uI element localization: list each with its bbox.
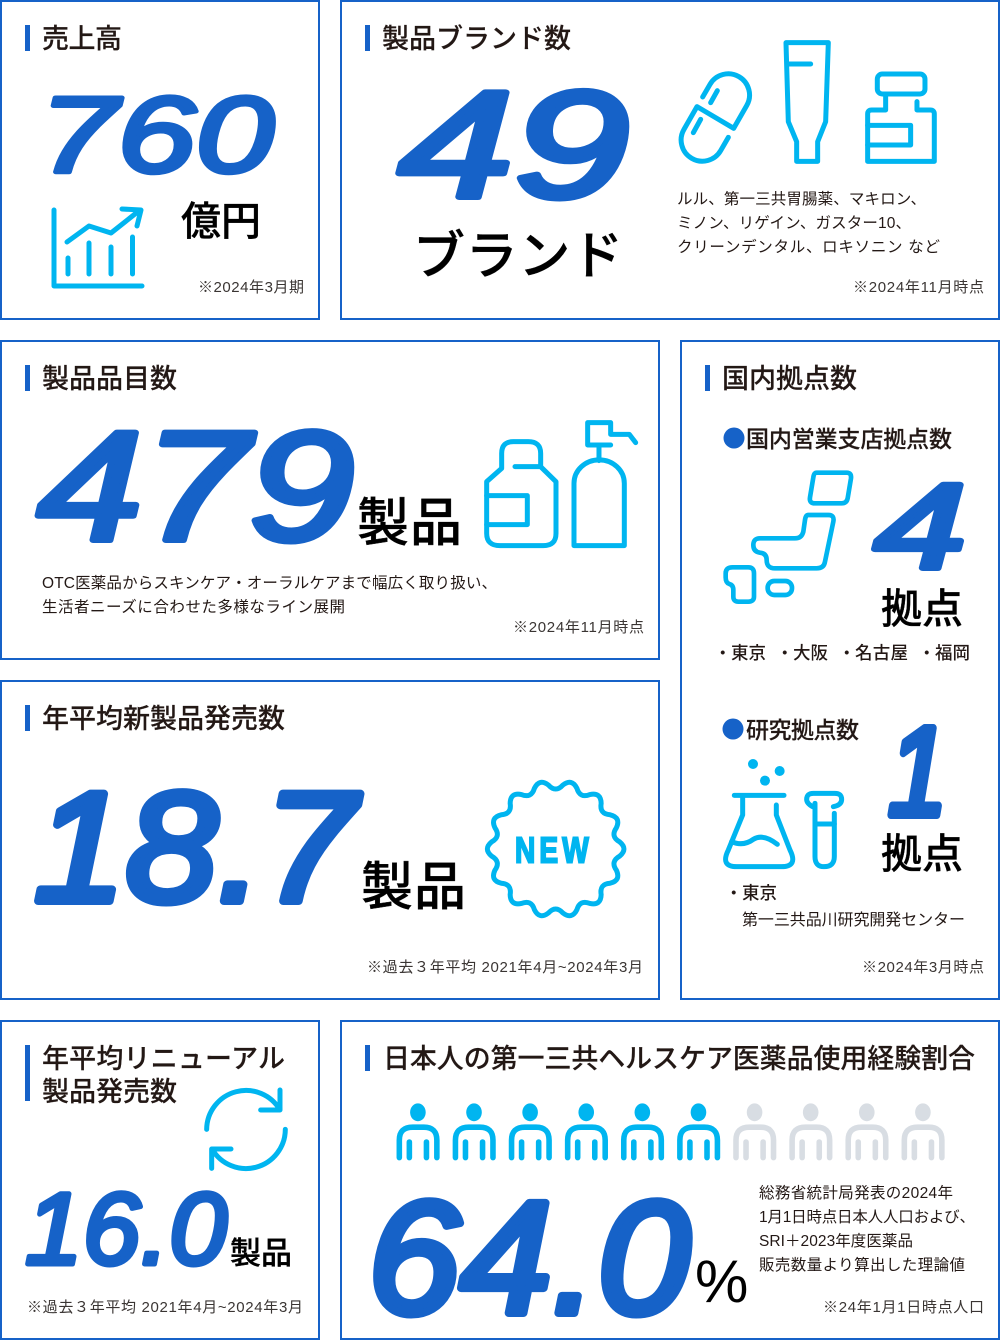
panel: renewal products xyxy=(1,1021,319,1339)
text: brand names: ルル、第一三共胃腸薬、マキロン、 xyxy=(677,190,926,208)
unit: ブランド: ブランド xyxy=(413,228,623,286)
heading: renewal products: 年平均リニューアル xyxy=(42,1044,285,1074)
panel: domestic sites xyxy=(681,341,999,999)
panel: product items xyxy=(1,341,659,659)
heading: sites: 国内拠点数 xyxy=(722,364,857,394)
number: 1: 1 xyxy=(888,701,948,842)
icon: test tube xyxy=(807,793,842,867)
heading: items: 製品品目数 xyxy=(42,364,177,394)
text: calculation basis: 販売数量より算出した理論値 xyxy=(759,1255,965,1274)
text: branch cities: 大阪 xyxy=(793,643,828,663)
text: branch cities: ・ xyxy=(776,643,794,663)
unit: 製品: 製品 xyxy=(361,859,466,917)
icon: bottle and pump xyxy=(487,423,636,546)
text: branch cities: 東京 xyxy=(731,643,766,663)
panel: product brands xyxy=(341,1,999,319)
panel: new products per year xyxy=(1,681,659,999)
note: items date: ※2024年11月時点 xyxy=(513,619,644,636)
text: branch cities: ・ xyxy=(714,643,732,663)
text: calculation basis: SRI＋2023年度医薬品 xyxy=(759,1232,913,1250)
text: calculation basis xyxy=(759,1184,975,1274)
note: population date: ※24年1月1日時点人口 xyxy=(823,1299,984,1316)
text: product range: OTC医薬品からスキンケア・オーラルケアまで幅広く取り扱い、 xyxy=(42,574,497,592)
subheading: sales branches: 国内営業支店拠点数 xyxy=(746,426,952,452)
unit: 製品: 製品 xyxy=(357,495,462,553)
heading: new products: 年平均新製品発売数 xyxy=(42,704,285,734)
number: 479: 479 xyxy=(37,398,355,573)
unit: 拠点: 拠点 xyxy=(881,586,963,632)
number: 760: 760 xyxy=(39,74,274,195)
unit: 製品: 製品 xyxy=(230,1236,292,1271)
icon: flask xyxy=(726,759,793,867)
subheading: research sites: 研究拠点数 xyxy=(746,717,859,743)
icon: refresh arrows xyxy=(207,1090,285,1169)
note: brands date: ※2024年11月時点 xyxy=(853,279,984,296)
icon: NEW badge xyxy=(487,782,624,916)
text: branch cities: 名古屋 xyxy=(855,643,908,663)
icon row: people 6 of 10 xyxy=(399,1103,942,1158)
note: new products period: ※過去３年平均 2021年4月~2024年3月 xyxy=(367,959,643,976)
panel: usage experience xyxy=(341,1021,999,1340)
number: 18.7: 18.7 xyxy=(34,761,361,935)
text: research site xyxy=(725,883,965,929)
heading: renewal products xyxy=(25,1044,285,1107)
icon: capsule xyxy=(681,74,750,161)
text: branch cities xyxy=(714,643,970,663)
heading: usage: 日本人の第一三共ヘルスケア医薬品使用経験割合 xyxy=(383,1044,975,1074)
text: brand names xyxy=(677,190,940,256)
text: product range: 生活者ニーズに合わせた多様なライン展開 xyxy=(42,598,345,616)
unit: 拠点 research: 拠点 xyxy=(881,831,963,877)
icon: medicine bottle xyxy=(868,74,934,161)
heading: sales: 売上高 xyxy=(42,24,122,54)
text: research site: 東京 xyxy=(742,883,777,903)
icon: map of Japan xyxy=(726,473,851,602)
note: sites date: ※2024年3月時点 xyxy=(862,959,984,976)
text: branch cities: ・ xyxy=(838,643,856,663)
unit: 億円: 億円 xyxy=(181,200,261,244)
text: branch cities: 福岡 xyxy=(935,643,970,663)
text: research site: ・ xyxy=(725,883,742,903)
text: brand names: クリーンデンタル、ロキソニン など xyxy=(677,237,940,256)
text: brand names: ミノン、リゲイン、ガスター10、 xyxy=(677,214,911,232)
number: 4: 4 xyxy=(874,459,966,594)
text: branch cities: ・ xyxy=(918,643,936,663)
panel: sales xyxy=(1,1,319,319)
text: calculation basis: 1月1日時点日本人人口および、 xyxy=(759,1208,975,1226)
text: product range xyxy=(42,574,497,616)
icon: NEW badge: NEW xyxy=(515,830,593,870)
text: research site: 第一三共品川研究開発センター xyxy=(742,911,965,929)
note: sales period: ※2024年3月期 xyxy=(198,279,304,296)
note: renewal period: ※過去３年平均 2021年4月~2024年3月 xyxy=(27,1299,303,1316)
number: 16.0: 16.0 xyxy=(25,1172,227,1286)
icon: tube xyxy=(786,43,828,161)
icon: growth chart xyxy=(54,209,142,286)
heading: renewal products: 製品発売数 xyxy=(42,1077,177,1107)
text: calculation basis: 総務省統計局発表の2024年 xyxy=(759,1184,953,1202)
number: 49: 49 xyxy=(398,59,629,230)
heading: brands: 製品ブランド数 xyxy=(382,24,571,54)
unit: percent: % xyxy=(695,1248,748,1315)
